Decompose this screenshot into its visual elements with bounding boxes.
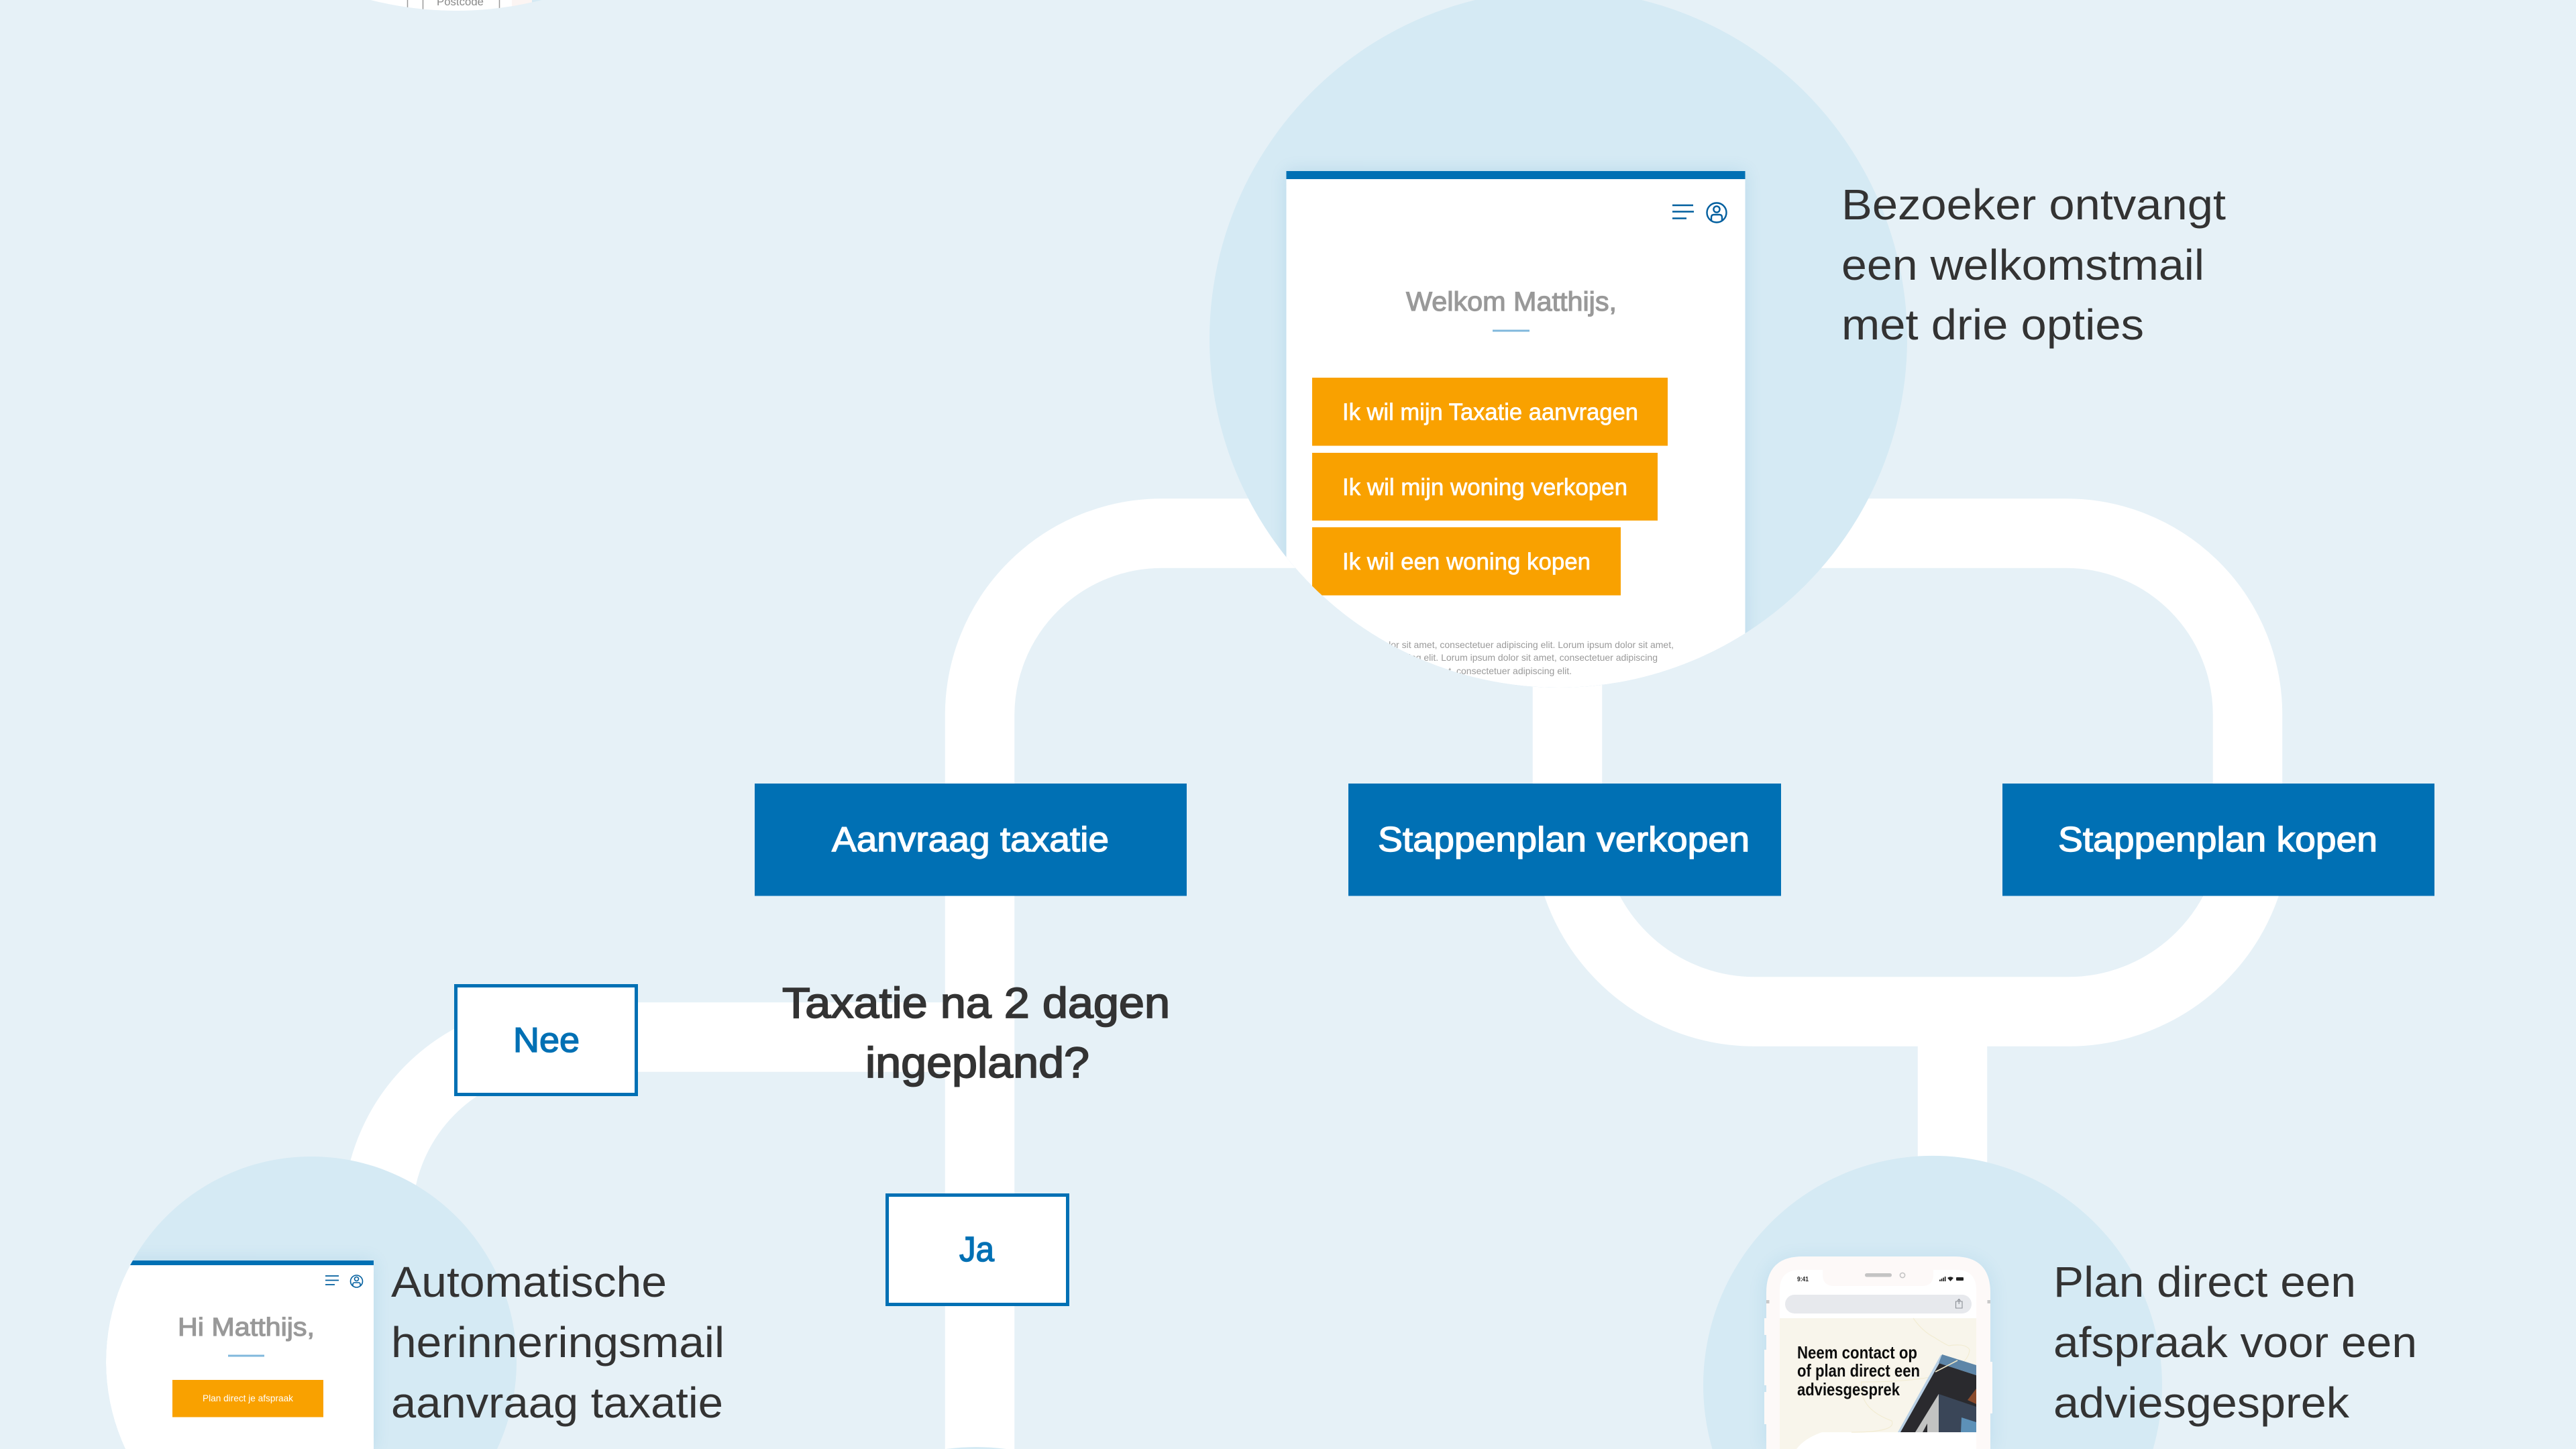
call to action button: Plan direct je afspraak [203,1393,294,1403]
question: taxatie ingepland: ingepland? [865,1038,1089,1087]
connector: nee branch to reminder mail [378,1037,979,1275]
email body copy: consectetuer adipiscing elit. Lorum ipsum dolor sit amet, consectetuer adipiscing [1323,652,1658,663]
icon: user [350,1275,362,1287]
box: stappenplan kopen: Stappenplan kopen [2058,820,2377,859]
phone side buttons [1764,1318,1992,1424]
icon: menu [1672,205,1694,219]
building photo [1898,1354,1976,1432]
email greeting: Welkom Matthijs, [1406,287,1617,317]
description: advice appointment [2053,1258,2417,1427]
url bar [1785,1295,1972,1313]
box: stappenplan verkopen [1348,784,1781,896]
phone screen [1780,1270,1976,1449]
hero block [1780,1318,1976,1449]
panel: reminder mail [67,1157,517,1449]
email greeting: Hi Matthijs, [178,1313,315,1342]
box: stappenplan kopen [2002,784,2434,896]
connector: centre stem to stappenplan verkopen [1533,604,1602,805]
circle backdrop [106,1157,517,1449]
email mockup [1281,166,1750,688]
icon: menu [325,1276,339,1285]
option button: kopen [1312,527,1621,596]
connector: merge down to advice appointment [1918,1012,1987,1208]
box: stappenplan verkopen: Stappenplan verkopen [1378,820,1750,859]
panel: advice appointment [1703,1156,2162,1449]
hero block: of plan direct een [1797,1360,1920,1381]
email body copy: dolor sit amet, consectetuer adipiscing elit. [1395,665,1572,676]
option button: taxatie: Ik wil mijn Taxatie aanvragen [1342,399,1638,425]
circle backdrop [1703,1156,2162,1449]
icon: share [1956,1299,1962,1308]
answer box: nee: Nee [513,1021,580,1060]
notch [1823,1270,1933,1286]
answer box: ja [887,1195,1068,1304]
box: aanvraag taxatie [755,784,1187,896]
hero headline: Neem contact op [1797,1342,1917,1362]
answer box: nee [456,986,636,1095]
phone shadow [1763,1256,1994,1449]
description: reminder mail: aanvraag taxatie [391,1379,723,1427]
box: aanvraag taxatie: Aanvraag taxatie [832,820,1109,859]
option button: verkopen [1312,453,1658,521]
description: welcome mail: met drie opties [1841,301,2144,349]
description: welcome mail: Bezoeker ontvangt [1841,180,2226,229]
circle backdrop [1210,0,1907,688]
previous step circle (cropped at top) [372,0,541,11]
description: reminder mail: Automatische [391,1258,667,1306]
email body copy [1389,641,1673,676]
description: advice appointment: Plan direct een [2053,1258,2356,1306]
hero block: adviesgesprek [1797,1379,1900,1399]
option button: taxatie [1312,378,1668,445]
status bar time: 9:41 [1797,1276,1809,1283]
question: taxatie ingepland: Taxatie na 2 dagen [782,979,1170,1027]
description: advice appointment: afspraak voor een [2053,1318,2417,1366]
option button: verkopen: Ik wil mijn woning verkopen [1342,474,1627,500]
description: advice appointment: adviesgesprek [2053,1379,2350,1427]
status bar icons [1939,1277,1964,1281]
description: reminder mail: herinneringsmail [391,1318,724,1366]
phone body [1766,1256,1990,1449]
question: taxatie ingepland [782,979,1170,1087]
description: reminder mail [391,1258,724,1427]
panel: welcome mail [1210,0,1907,688]
connector: stappenplan routes merging [1567,805,2256,1012]
description: welcome mail: een welkomstmail [1841,241,2204,289]
connector: three options from welcome mail [979,533,2247,1449]
phone mockup [1763,1256,1994,1449]
call to action button [172,1380,323,1417]
description: welcome mail [1841,180,2226,349]
email mockup [67,1260,374,1449]
answer box: ja: Ja [959,1230,994,1269]
icon: user [1707,203,1727,223]
option button: kopen: Ik wil een woning kopen [1342,549,1591,575]
connector lines [378,533,2256,1449]
next step circle (cropped at bottom) [946,1447,1006,1449]
email body copy: Lorum ipsum dolor sit amet, consectetuer adipiscing elit. Lorum ipsum dolor sit amet, [1322,639,1674,650]
